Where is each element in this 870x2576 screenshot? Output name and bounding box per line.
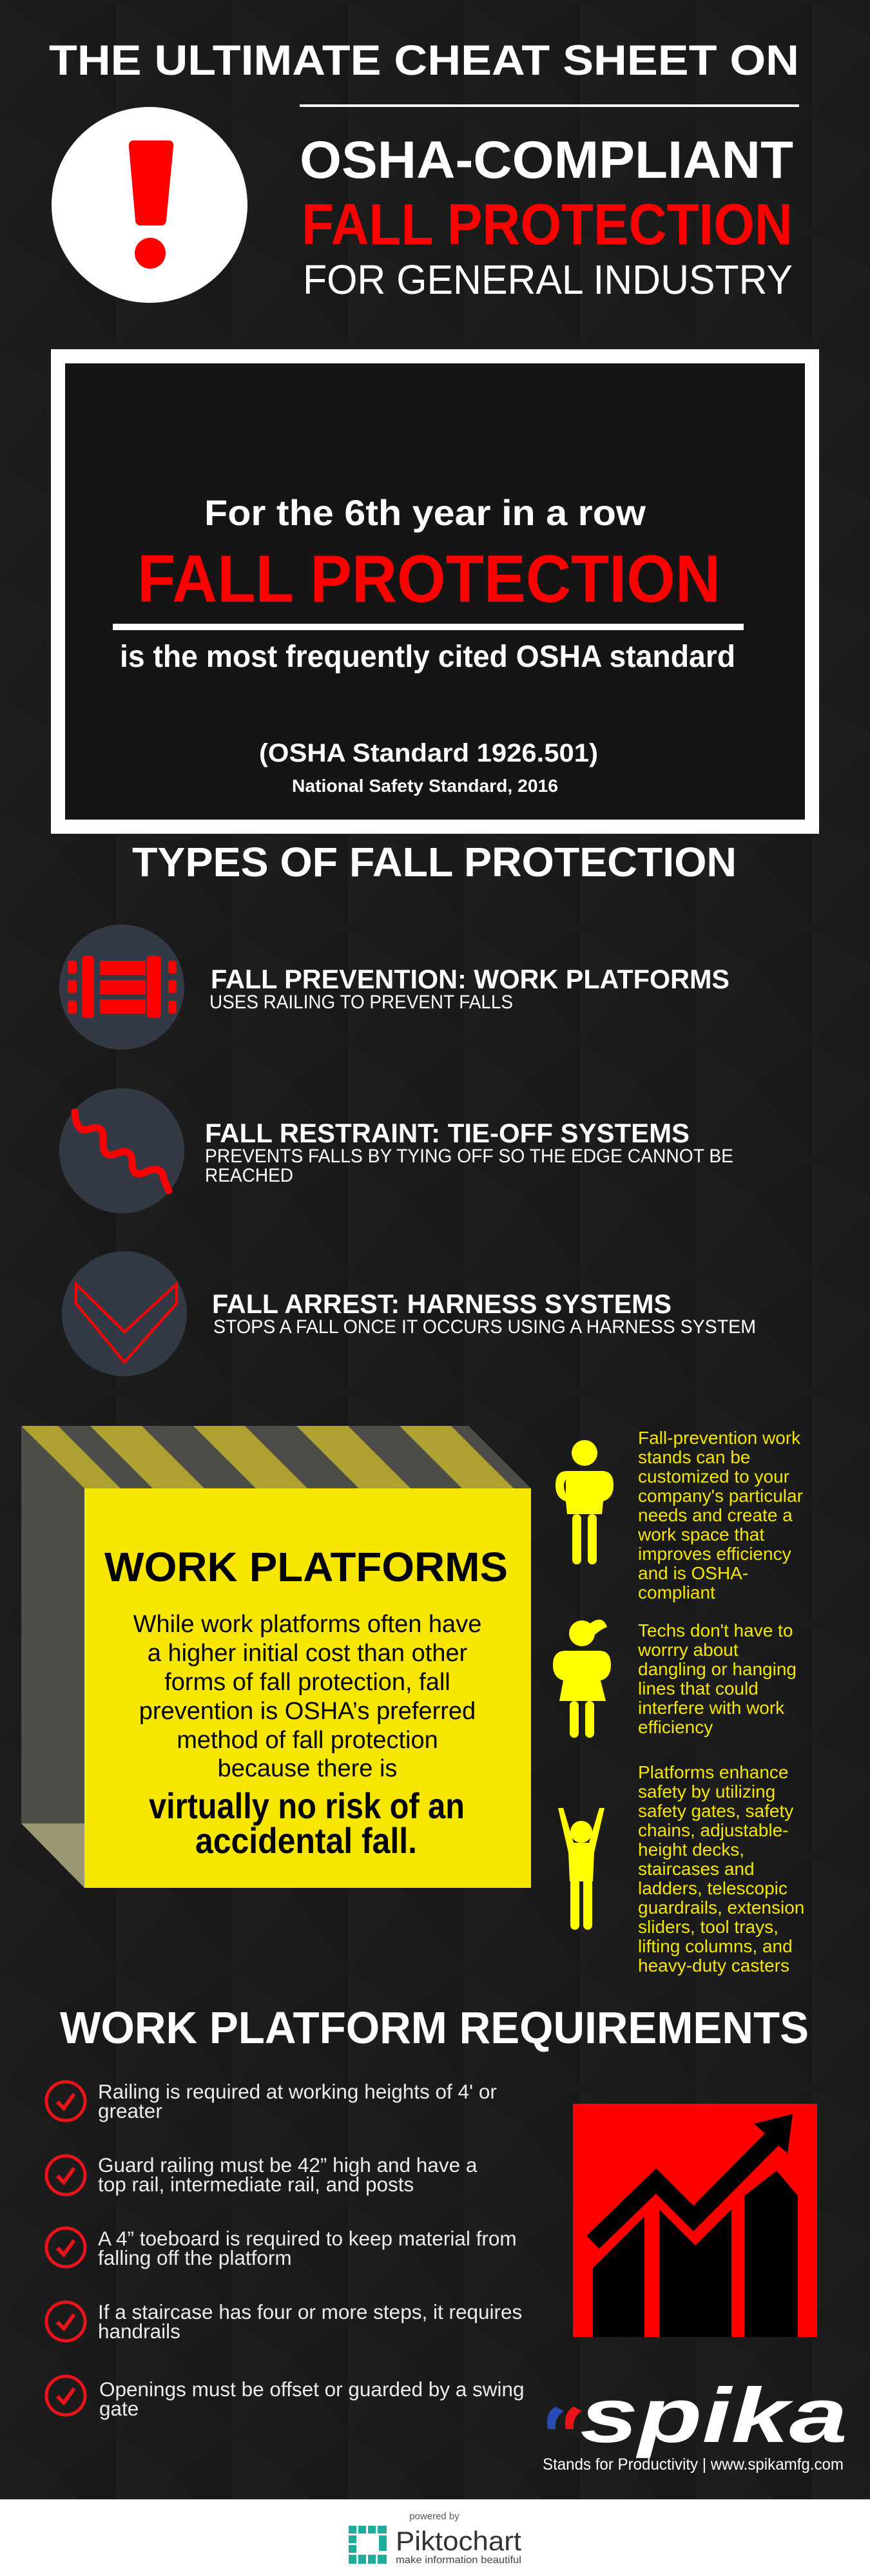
icon: railing: [59, 925, 184, 1050]
text: benefit 2: worrry about: [637, 1640, 739, 1660]
list: requirements: A 4” toeboard is required to keep material from: [98, 2227, 517, 2250]
text: benefit 2: dangling or hanging: [638, 1659, 797, 1679]
logo: spika: [543, 2372, 847, 2474]
footer: make information beautiful: [396, 2555, 521, 2566]
footer: powered by: [409, 2511, 459, 2522]
text: benefit 2: interfere with work: [638, 1698, 785, 1718]
panel: work platforms box: virtually no risk of an: [149, 1785, 465, 1826]
list: requirements: Openings must be offset or guarded by a swing: [99, 2378, 525, 2401]
icon: person 1: [556, 1440, 614, 1564]
panel: stat box: is the most frequently cited OSHA standard: [120, 640, 735, 674]
text: fall restraint: [205, 1118, 733, 1186]
text: benefit 1: compliant: [638, 1582, 715, 1602]
text: benefit 3: [638, 1762, 804, 1975]
text: benefit 3: sliders, tool trays,: [638, 1917, 778, 1937]
text: benefit 3: safety gates, safety: [638, 1801, 793, 1821]
text: benefit 2: lines that could: [638, 1678, 759, 1698]
text: benefit 3: Platforms enhance: [638, 1762, 788, 1782]
text: benefit 1: work space that: [637, 1524, 764, 1544]
text: benefit 1: needs and create a: [638, 1505, 793, 1525]
list: requirements: Railing is required at working heights of 4' or: [98, 2080, 497, 2103]
icon: rope: [59, 1088, 184, 1213]
panel: work platforms box: forms of fall protection, fall: [164, 1669, 450, 1696]
icon: exclamation circle: [52, 107, 247, 303]
text: benefit 1: stands can be: [638, 1447, 750, 1467]
text: benefit 1: improves efficiency: [638, 1544, 791, 1564]
subtitle: FALL PROTECTION: [302, 193, 793, 257]
panel: work platforms box: because there is: [218, 1755, 397, 1782]
text: benefit 3: height decks,: [638, 1840, 744, 1860]
panel: stat box: National Safety Standard, 2016: [292, 776, 558, 796]
text: benefit 1: and is OSHA-: [638, 1563, 748, 1583]
panel: work platforms box: accidental fall.: [195, 1820, 417, 1861]
icon: chevron: [62, 1251, 187, 1376]
text: benefit 2: [637, 1620, 797, 1737]
panel: work platforms box: While work platforms often have: [133, 1611, 481, 1638]
text: benefit 2: efficiency: [638, 1717, 713, 1737]
panel: stat box: For the 6th year in a row: [204, 492, 646, 533]
panel: work platforms box: method of fall protection: [177, 1727, 438, 1754]
text: fall prevention: [209, 964, 730, 1013]
list: requirements: [46, 2080, 525, 2420]
icon: person 2: [553, 1620, 611, 1738]
footer: [0, 2499, 870, 2576]
list: requirements: gate: [99, 2397, 139, 2420]
panel: stat box: FALL PROTECTION: [137, 542, 720, 617]
list: requirements: falling off the platform: [98, 2246, 292, 2269]
heading: requirements: WORK PLATFORM REQUIREMENTS: [60, 2003, 809, 2053]
subtitle: OSHA-COMPLIANT: [300, 131, 793, 189]
footer: Piktochart: [396, 2526, 521, 2556]
list: requirements: greater: [98, 2099, 162, 2122]
text: fall arrest: STOPS A FALL ONCE IT OCCURS USING A HARNESS SYSTEM: [213, 1316, 756, 1338]
heading: types: TYPES OF FALL PROTECTION: [132, 839, 737, 885]
text: fall restraint: REACHED: [205, 1165, 293, 1186]
text: benefit 3: staircases and: [638, 1859, 755, 1879]
text: fall restraint: FALL RESTRAINT: TIE-OFF SYSTEMS: [205, 1118, 690, 1148]
panel: work platforms box: WORK PLATFORMS: [104, 1544, 508, 1590]
subtitle: [300, 131, 793, 303]
text: benefit 3: safety by utilizing: [638, 1782, 775, 1802]
text: fall restraint: PREVENTS FALLS BY TYING OFF SO THE EDGE CANNOT BE: [205, 1146, 733, 1167]
text: fall prevention: FALL PREVENTION: WORK PLATFORMS: [211, 964, 730, 994]
text: fall arrest: [212, 1289, 756, 1338]
text: benefit 1: Fall-prevention work: [638, 1428, 801, 1448]
subtitle: FOR GENERAL INDUSTRY: [303, 256, 793, 303]
panel: stat box: [58, 356, 812, 827]
logo: spika: Stands for Productivity | www.spikamfg.com: [543, 2456, 844, 2474]
text: benefit 1: customized to your: [638, 1466, 789, 1486]
panel: work platforms box: [0, 1426, 531, 1888]
panel: stat box: (OSHA Standard 1926.501): [259, 739, 598, 767]
text: benefit 3: ladders, telescopic: [638, 1878, 788, 1898]
chart icon: [573, 2104, 817, 2337]
logo: spika: spika: [580, 2372, 847, 2459]
list: requirements: If a staircase has four or more steps, it requires: [98, 2300, 522, 2323]
text: benefit 1: company's particular: [638, 1486, 803, 1506]
text: fall prevention: USES RAILING TO PREVENT FALLS: [209, 992, 513, 1013]
panel: work platforms box: prevention is OSHA’s preferred: [139, 1698, 476, 1725]
text: benefit 2: Techs don't have to: [638, 1620, 793, 1640]
list: requirements: handrails: [98, 2320, 180, 2343]
text: benefit 3: heavy-duty casters: [638, 1956, 789, 1975]
text: benefit 3: lifting columns, and: [638, 1936, 793, 1956]
text: benefit 1: [637, 1428, 803, 1602]
panel: work platforms box: a higher initial cost than other: [148, 1640, 468, 1667]
text: benefit 3: guardrails, extension: [638, 1898, 804, 1918]
text: fall arrest: FALL ARREST: HARNESS SYSTEMS: [212, 1289, 672, 1319]
title: THE ULTIMATE CHEAT SHEET ON: [49, 36, 799, 84]
list: requirements: top rail, intermediate rail, and posts: [98, 2173, 414, 2196]
icon: person 3: [558, 1808, 604, 1930]
list: requirements: Guard railing must be 42” high and have a: [98, 2153, 478, 2177]
text: benefit 3: chains, adjustable-: [638, 1820, 788, 1840]
